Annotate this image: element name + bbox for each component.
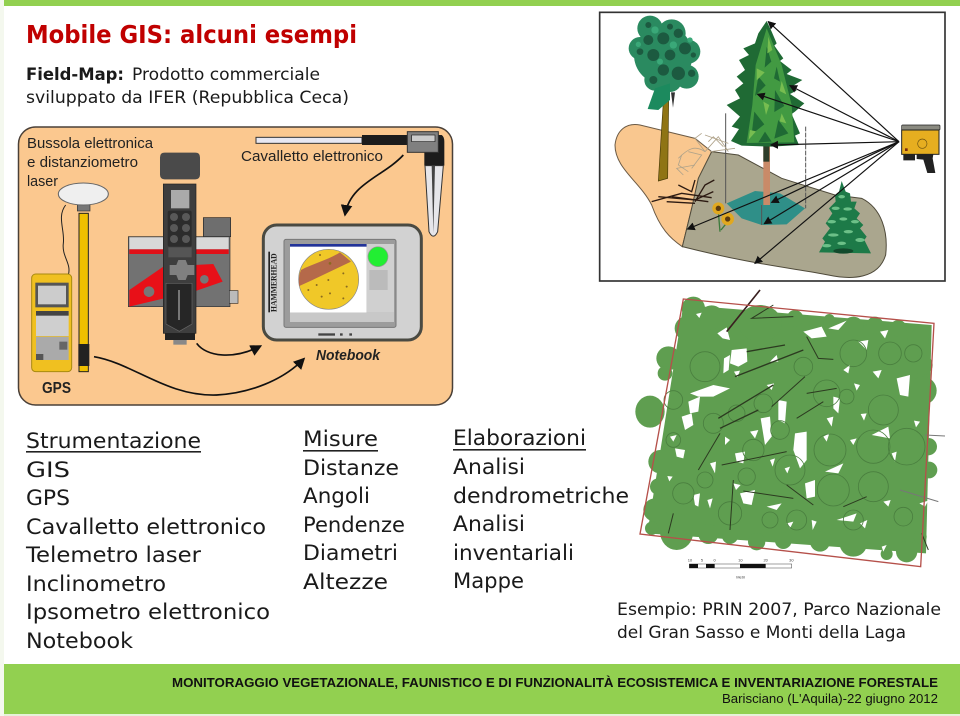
tree crown projections bbox=[635, 297, 937, 562]
icon: electronic caliper bbox=[256, 132, 444, 236]
icon: large conifer bbox=[727, 21, 804, 205]
fallen trunks bbox=[668, 290, 945, 550]
crown outlines bbox=[664, 340, 925, 530]
measurement box bbox=[726, 113, 806, 225]
map scale bar: 5 bbox=[701, 557, 704, 562]
caption: caliper: Cavalletto elettronico bbox=[241, 149, 383, 165]
icon: broadleaf tree bbox=[629, 16, 700, 181]
text block: instruments list: Inclinometro bbox=[26, 572, 166, 596]
instrument drawings bbox=[32, 132, 444, 395]
caption: notebook: Notebook bbox=[316, 348, 381, 364]
icon: notebook tablet: HAMMERHEAD bbox=[269, 253, 279, 312]
panel: canopy map bbox=[635, 290, 945, 580]
intro text block bbox=[26, 65, 349, 107]
map scale bar: Metri bbox=[736, 575, 745, 580]
ground: sand area bbox=[615, 124, 712, 247]
map scale bar: 20 bbox=[763, 557, 769, 562]
icon: laser rangefinder bbox=[902, 125, 940, 173]
text block: instruments list: Notebook bbox=[26, 629, 134, 653]
panel background bbox=[18, 127, 452, 405]
caption: compass and laser bbox=[27, 136, 154, 190]
arrow: laser device to notebook bbox=[197, 343, 261, 355]
map scale bar: 10 bbox=[738, 557, 743, 562]
map caption bbox=[617, 600, 941, 643]
text block: measurements list: Misure bbox=[303, 427, 378, 451]
text block: instruments list bbox=[25, 429, 270, 653]
icon: shrubs and deadwood bbox=[652, 133, 735, 203]
text block: instruments list: Strumentazione bbox=[26, 429, 201, 453]
text block: instruments list: Ipsometro elettronico bbox=[26, 600, 270, 624]
text block: instruments list: GPS bbox=[26, 486, 70, 510]
icon: notebook tablet bbox=[263, 225, 421, 340]
text block: processing list bbox=[453, 426, 629, 593]
title: Mobile GIS: alcuni esempi bbox=[26, 20, 357, 49]
gaps in the canopy bbox=[667, 313, 928, 552]
icon: sunflowers bbox=[712, 202, 734, 232]
footer band: Barisciano (L'Aquila)-22 giugno 2012 bbox=[722, 691, 938, 706]
text block: measurements list bbox=[303, 427, 405, 594]
text block: measurements list: Angoli bbox=[303, 484, 370, 508]
footer band bbox=[4, 664, 960, 716]
map scale bar bbox=[688, 557, 794, 580]
intro text block: Field-Map: bbox=[26, 65, 124, 84]
ground: grey area bbox=[682, 152, 886, 277]
text block: measurements list: Altezze bbox=[303, 570, 388, 594]
map caption: del Gran Sasso e Monti della Laga bbox=[617, 623, 906, 643]
caption: compass and laser: Bussola elettronica bbox=[27, 136, 154, 152]
arrow: caliper to notebook bbox=[345, 155, 403, 215]
text block: processing list: Analisi bbox=[453, 455, 525, 479]
text block: processing list: Mappe bbox=[453, 569, 524, 593]
text block: instruments list: Cavalletto elettronico bbox=[26, 515, 266, 539]
footer band: MONITORAGGIO VEGETAZIONALE, FAUNISTICO E DI FUNZIONALITÀ ECOSISTEMICA E INVENTARIAZIONE FORESTALE bbox=[172, 675, 938, 690]
text block: measurements list: Pendenze bbox=[303, 513, 405, 537]
map scale bar: 0 bbox=[714, 557, 717, 562]
plot area bbox=[727, 191, 805, 225]
arrow: GPS to notebook bbox=[94, 357, 304, 395]
icon: GPS handheld bbox=[32, 274, 72, 372]
icon: small conifer bbox=[819, 181, 871, 254]
panel: instruments diagram bbox=[18, 127, 452, 405]
caption: compass and laser: laser bbox=[27, 174, 58, 190]
arrows: laser sight lines bbox=[688, 22, 899, 263]
intro text block: sviluppato da IFER (Repubblica Ceca) bbox=[26, 88, 349, 107]
text block: instruments list: GIS bbox=[26, 458, 70, 482]
text block: processing list: Elaborazioni bbox=[453, 426, 586, 450]
text block: instruments list: Telemetro laser bbox=[25, 543, 201, 567]
icon: GPS antenna pole bbox=[58, 183, 108, 372]
caption: GPS: GPS bbox=[42, 380, 71, 397]
text block: processing list: dendrometriche bbox=[453, 484, 629, 508]
intro text block: Prodotto commerciale bbox=[132, 65, 320, 84]
panel: forest scene with laser bbox=[600, 12, 945, 281]
scene frame bbox=[600, 12, 945, 281]
text block: processing list: Analisi bbox=[453, 512, 525, 536]
map scale bar: 30 bbox=[789, 557, 794, 562]
icon: laser compass device bbox=[128, 153, 238, 345]
text block: measurements list: Diametri bbox=[303, 541, 398, 565]
plot boundary bbox=[640, 299, 934, 567]
text block: measurements list: Distanze bbox=[303, 456, 399, 480]
caption: compass and laser: e distanziometro bbox=[27, 155, 138, 171]
map scale bar: 10 bbox=[688, 557, 693, 562]
map caption: Esempio: PRIN 2007, Parco Nazionale bbox=[617, 600, 941, 620]
text block: processing list: inventariali bbox=[453, 541, 574, 565]
